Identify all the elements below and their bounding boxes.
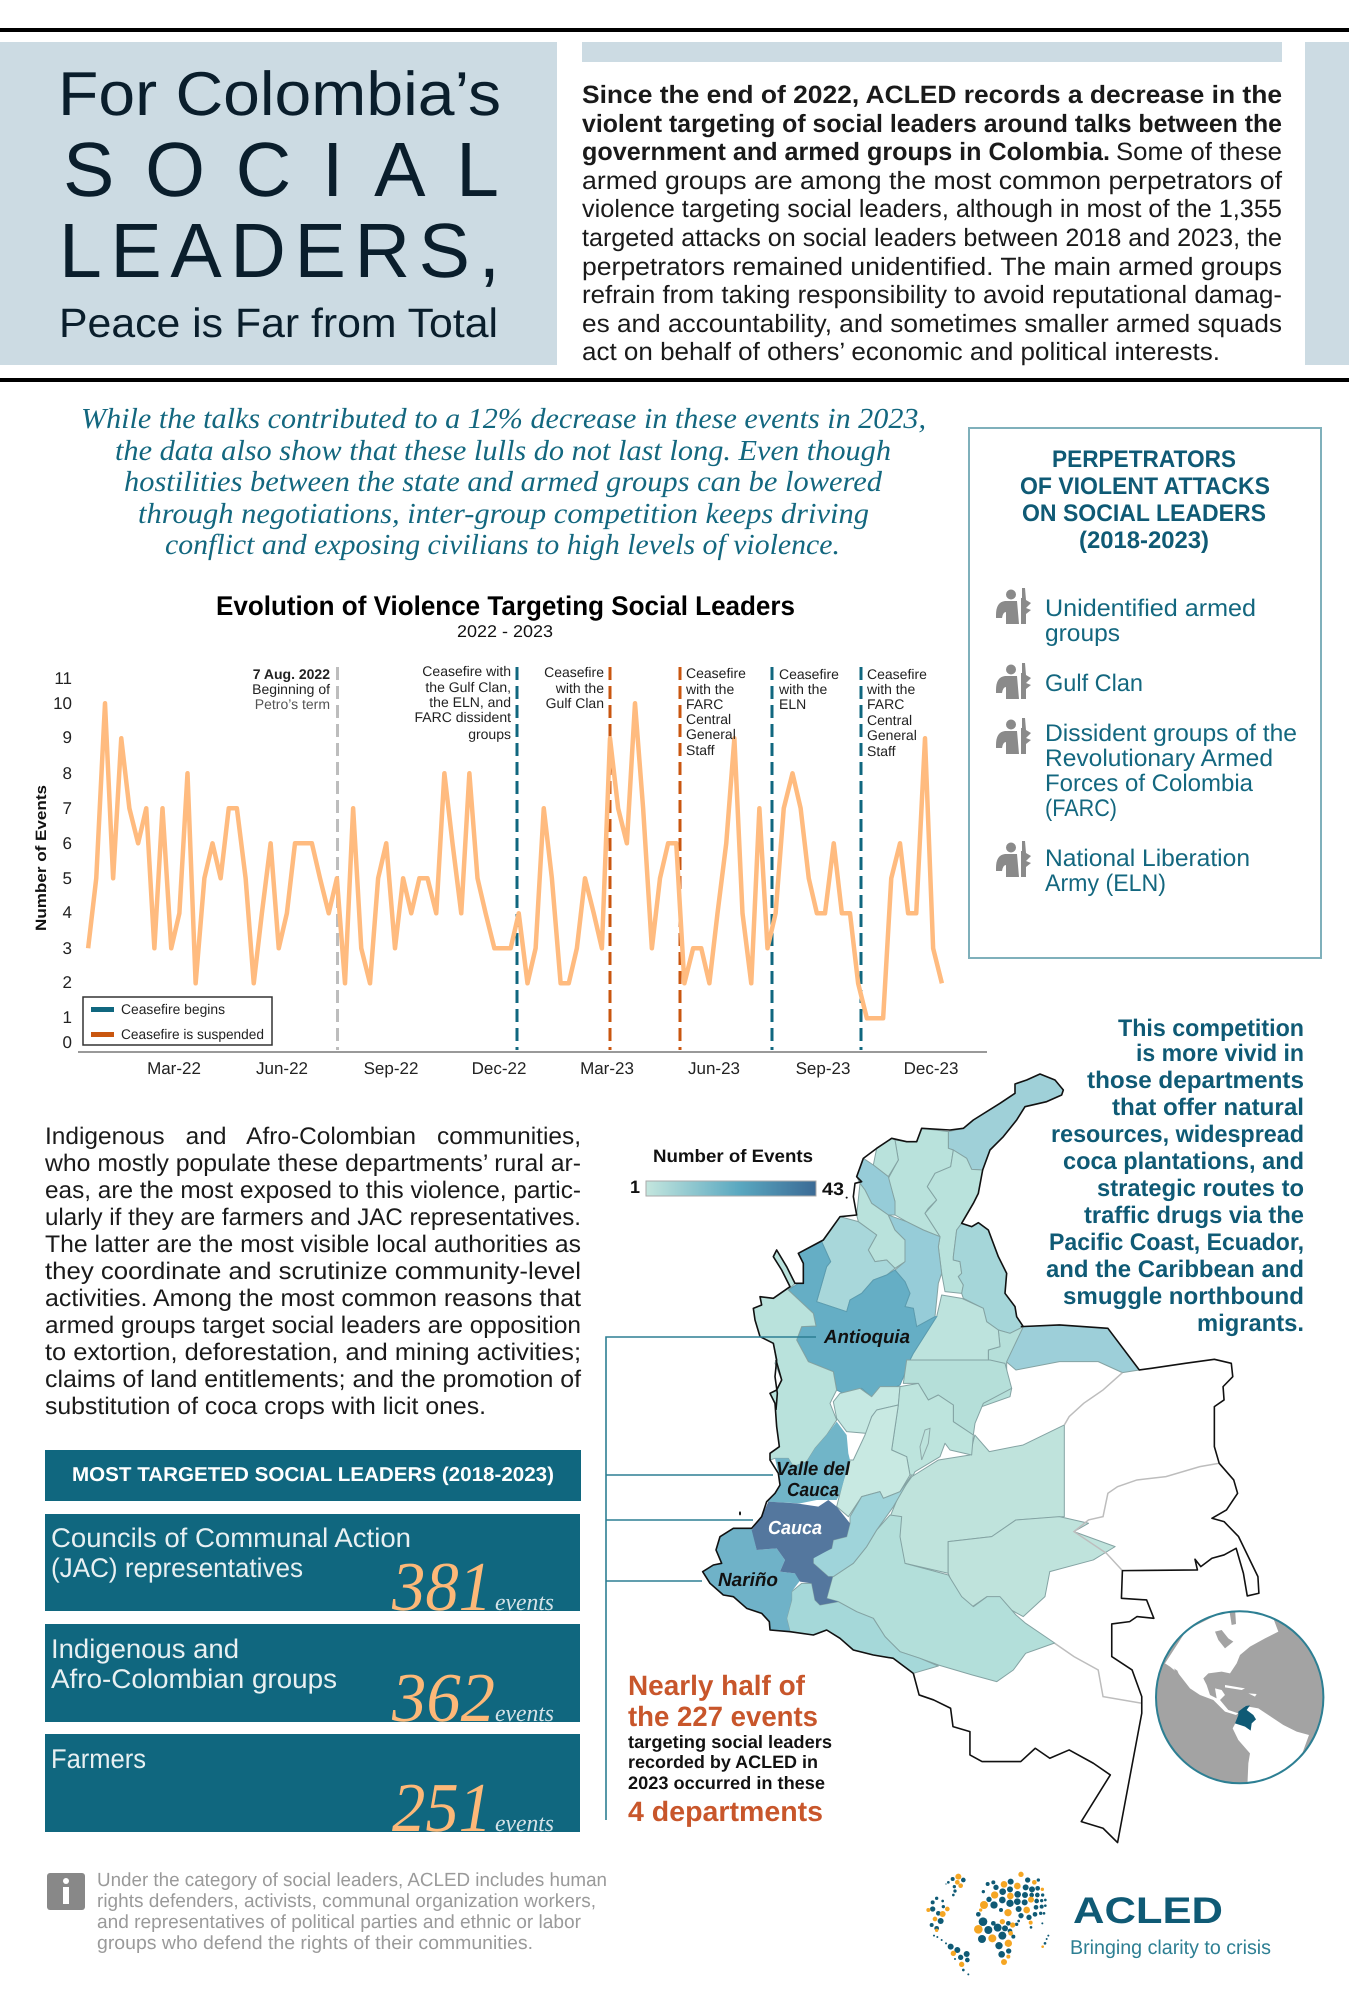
annotation: ceasefire with FARC Central General Staff (second): Ceasefire — [867, 666, 927, 682]
text block: introduction — [582, 81, 1282, 366]
text block: competition callout: and the Caribbean and — [1046, 1256, 1304, 1283]
annotation: ceasefire with Gulf Clan, ELN and FARC dissidents: the ELN, and — [429, 694, 511, 710]
annotation: ceasefire with FARC Central General Staff: Ceasefire — [686, 665, 746, 681]
label: national liberation army — [1045, 845, 1250, 897]
map: Colombia departments — [703, 1074, 1259, 1843]
text block: italic pull quote — [81, 403, 926, 561]
card: Indigenous and Afro-Colombian groups: Afro-Colombian groups — [51, 1664, 337, 1694]
text block: italic pull quote: through negotiations, inter-group competition keeps driving — [138, 498, 869, 530]
annotation: beginning of Petro's term: Beginning of — [252, 681, 330, 697]
heading bar — [45, 1450, 581, 1501]
annotation: ceasefire with Gulf Clan, ELN and FARC dissidents: the Gulf Clan, — [425, 679, 511, 695]
chart title: 2022 - 2023 — [457, 622, 553, 641]
heading: perpetrators — [1020, 446, 1270, 554]
text block: note on social leaders: Under the category of social leaders, ACLED includes human — [97, 1870, 607, 1891]
y axis labels: 6 — [63, 834, 72, 853]
annotation: ceasefire with Gulf Clan, ELN and FARC dissidents: FARC dissident — [415, 709, 511, 725]
text block: nearly half callout: recorded by ACLED in — [628, 1752, 818, 1772]
annotation: ceasefire with ELN — [778, 666, 839, 712]
map label: Valle del Cauca: Valle del — [776, 1459, 851, 1480]
text block: competition callout: those departments — [1087, 1067, 1304, 1094]
map legend: number of events: Number of Events — [653, 1146, 813, 1166]
chart legend: Ceasefire is suspended — [121, 1026, 264, 1042]
text block: communities: eas, are the most exposed to this violence, partic- — [45, 1177, 581, 1204]
x axis labels: Sep-23 — [796, 1059, 850, 1078]
card: JAC representatives: (JAC) representatives — [51, 1553, 303, 1583]
icon: armed person — [996, 663, 1031, 699]
x axis labels: Mar-22 — [147, 1059, 201, 1078]
text block: competition callout: is more vivid in — [1136, 1040, 1304, 1067]
text block: communities: substitution of coca crops with licit ones. — [45, 1393, 486, 1420]
heading bar: MOST TARGETED SOCIAL LEADERS (2018-2023) — [72, 1464, 554, 1486]
title: For Colombia’s — [58, 60, 501, 129]
label: unidentified armed groups: Unidentified armed — [1045, 595, 1256, 622]
text block: introduction: armed groups are among the most common perpetrators of — [582, 167, 1282, 195]
text block: competition callout: migrants. — [1197, 1310, 1304, 1337]
heading: perpetrators: ON SOCIAL LEADERS — [1022, 500, 1266, 527]
text block: competition callout: smuggle northbound — [1063, 1283, 1304, 1310]
icon: armed person — [996, 588, 1031, 624]
text block: nearly half callout: Nearly half of — [628, 1670, 806, 1701]
annotation: ceasefire with FARC Central General Staff (second): Central — [867, 712, 912, 728]
panel: title — [0, 42, 557, 365]
text block: competition callout: Pacific Coast, Ecuador, — [1049, 1229, 1304, 1256]
map label: Nariño: Nariño — [718, 1570, 778, 1591]
logo: ACLED — [926, 1872, 1271, 1975]
card: JAC representatives: events — [495, 1590, 554, 1616]
annotation: beginning of Petro's term: 7 Aug. 2022 — [253, 666, 330, 682]
text block: competition callout: coca plantations, and — [1063, 1148, 1304, 1175]
card: Indigenous and Afro-Colombian groups: Indigenous and — [51, 1634, 239, 1664]
annotation: ceasefire with FARC Central General Staff — [685, 665, 746, 758]
annotation: ceasefire with FARC Central General Staff: Staff — [686, 742, 715, 758]
text block: communities: claims of land entitlements; and the promotion of — [45, 1366, 581, 1393]
label: FARC dissidents: Dissident groups of the — [1045, 720, 1297, 747]
annotation: beginning of Petro's term — [252, 666, 330, 712]
text block: communities: to extortion, deforestation, and mining activities; — [45, 1339, 581, 1366]
panel: top accent bar — [582, 42, 1282, 62]
label: unidentified armed groups: groups — [1045, 620, 1120, 647]
card: farmers: events — [495, 1811, 554, 1837]
ceasefire event markers — [338, 667, 861, 1050]
x axis labels — [147, 1059, 958, 1078]
annotation: ceasefire with Gulf Clan: Ceasefire — [544, 664, 604, 680]
card: JAC representatives — [45, 1514, 580, 1626]
annotation: ceasefire with FARC Central General Staff: with the — [685, 681, 734, 697]
heading: perpetrators: OF VIOLENT ATTACKS — [1020, 473, 1270, 500]
annotation: ceasefire with Gulf Clan: Gulf Clan — [546, 695, 604, 711]
title: SOCIAL — [63, 127, 499, 213]
card: farmers — [45, 1734, 580, 1847]
heading: perpetrators: PERPETRATORS — [1052, 446, 1236, 473]
card: JAC representatives: 381 — [391, 1549, 492, 1626]
y axis title: Number of Events — [33, 785, 50, 931]
text block: introduction: targeted attacks on social leaders between 2018 and 2023, the — [582, 224, 1282, 252]
card: Indigenous and Afro-Colombian groups — [45, 1624, 580, 1737]
heading: perpetrators: (2018-2023) — [1079, 527, 1209, 554]
annotation: ceasefire with ELN: Ceasefire — [779, 666, 839, 682]
text block: nearly half callout: targeting social leaders — [628, 1732, 832, 1752]
logo wordmark: ACLED — [1073, 1890, 1223, 1931]
annotation: ceasefire with FARC Central General Staff: General — [686, 726, 736, 742]
icon: dotted globe — [926, 1872, 1049, 1975]
map legend: number of events: 43 — [822, 1179, 844, 1199]
text block: introduction: violence targeting social leaders, although in most of the 1,355 — [582, 195, 1282, 223]
logo tagline: Bringing clarity to crisis — [1070, 1937, 1271, 1959]
x axis labels: Dec-23 — [904, 1059, 958, 1078]
annotation: ceasefire with ELN: with the — [778, 681, 827, 697]
panel: most targeted social leaders — [45, 1450, 581, 1847]
text block: italic pull quote: the data also show that these lulls do not last long. Even though — [115, 435, 891, 467]
title: Peace is Far from Total — [59, 300, 498, 346]
label: unidentified armed groups — [1045, 595, 1256, 647]
card: Indigenous and Afro-Colombian groups: 362 — [391, 1660, 495, 1737]
label: FARC dissidents: Forces of Colombia — [1045, 770, 1254, 797]
y axis labels — [53, 669, 72, 1052]
annotation: ceasefire with FARC Central General Staff (second): Staff — [867, 743, 896, 759]
y axis labels: 0 — [63, 1033, 72, 1052]
map legend: number of events — [630, 1146, 844, 1199]
icon: armed person — [996, 718, 1031, 754]
text block: note on social leaders: groups who defend the rights of their communities. — [97, 1933, 533, 1954]
title — [58, 60, 501, 346]
annotation: ceasefire with Gulf Clan: with the — [555, 680, 604, 696]
x axis labels: Jun-22 — [256, 1059, 308, 1078]
label: national liberation army: National Liberation — [1045, 845, 1250, 872]
text block: introduction: act on behalf of others’ economic and political interests. — [582, 338, 1220, 366]
annotation: ceasefire with FARC Central General Staff (second) — [866, 666, 927, 759]
text block: communities: they coordinate and scrutinize community-level — [45, 1258, 581, 1285]
text block: introduction: Since the end of 2022, ACLED records a decrease in the — [582, 81, 1282, 109]
map label: Antioquia: Antioquia — [823, 1327, 910, 1348]
x axis labels: Mar-23 — [580, 1059, 634, 1078]
label: gulf clan: Gulf Clan — [1045, 670, 1143, 697]
y axis labels: 9 — [63, 728, 72, 747]
chart legend: Ceasefire begins — [121, 1001, 225, 1017]
annotation: ceasefire with ELN: ELN — [779, 696, 806, 712]
x axis labels: Sep-22 — [364, 1059, 418, 1078]
text block: communities: who mostly populate these departments’ rural ar- — [44, 1150, 581, 1177]
text block: introduction: Some of these — [1116, 138, 1282, 166]
text block: italic pull quote: hostilities between the state and armed groups can be lowered — [124, 466, 883, 498]
text block: communities: activities. Among the most common reasons that — [45, 1285, 581, 1312]
title: LEADERS, — [59, 208, 500, 294]
text block: nearly half callout — [628, 1670, 832, 1827]
text block: note on social leaders: rights defenders, activists, communal organization workers, — [97, 1891, 596, 1912]
y axis labels: 8 — [63, 764, 72, 783]
map label: Valle del Cauca — [776, 1459, 851, 1501]
map label: Valle del Cauca: Cauca — [787, 1480, 839, 1501]
y axis labels: 10 — [53, 694, 72, 713]
card: JAC representatives: Councils of Communal Action — [51, 1523, 411, 1553]
x axis labels: Dec-22 — [472, 1059, 526, 1078]
annotation: ceasefire with FARC Central General Staff: FARC — [686, 696, 723, 712]
text block: nearly half callout: the 227 events — [628, 1701, 818, 1732]
text block: introduction: refrain from taking responsibility to avoid reputational damag- — [582, 281, 1282, 309]
map label: Cauca: Cauca — [768, 1518, 822, 1539]
label: FARC dissidents: Revolutionary Armed — [1045, 745, 1273, 772]
text block: competition callout: that offer natural — [1112, 1094, 1304, 1121]
panel: perpetrators — [969, 428, 1321, 958]
annotation: ceasefire with Gulf Clan — [544, 664, 604, 711]
panel: right accent block — [1305, 42, 1349, 365]
text block: communities: ularly if they are farmers and JAC representatives. — [45, 1204, 581, 1231]
map legend: number of events: 1 — [630, 1177, 640, 1197]
text block: introduction: violent targeting of social leaders around talks between the — [582, 110, 1282, 138]
chart legend — [83, 997, 272, 1045]
chart title — [216, 591, 795, 641]
y axis labels: 7 — [63, 799, 72, 818]
text block: competition callout: This competition — [1118, 1015, 1304, 1042]
text block: competition callout — [1046, 1015, 1304, 1337]
annotation: ceasefire with FARC Central General Staff: Central — [686, 711, 731, 727]
text block: note on social leaders — [97, 1870, 607, 1954]
annotation: ceasefire with Gulf Clan, ELN and FARC dissidents — [415, 663, 511, 742]
y axis labels: 11 — [54, 669, 72, 688]
text block: introduction: perpetrators remained unidentified. The main armed groups — [582, 253, 1282, 281]
annotation: ceasefire with FARC Central General Staff (second): FARC — [867, 696, 904, 712]
text block: communities — [44, 1123, 581, 1420]
annotation: beginning of Petro's term: Petro’s term — [255, 696, 330, 712]
text block: communities: Indigenous and Afro-Colombian communities, — [45, 1123, 581, 1150]
callout connector lines — [606, 1337, 816, 1820]
chart: evolution of violence line chart — [33, 591, 987, 1078]
card: farmers: 251 — [392, 1770, 492, 1847]
text block: competition callout: strategic routes to — [1097, 1175, 1304, 1202]
icon: info — [47, 1873, 85, 1910]
annotation: ceasefire with FARC Central General Staff (second): General — [867, 727, 917, 743]
text block: nearly half callout: 4 departments — [628, 1796, 823, 1827]
text block: competition callout: resources, widespread — [1051, 1121, 1304, 1148]
text block: introduction: es and accountability, and sometimes smaller armed squads — [582, 310, 1282, 338]
y axis labels: 5 — [63, 869, 72, 888]
text block: introduction: government and armed groups in Colombia. — [582, 138, 1110, 166]
x axis labels: Jun-23 — [688, 1059, 740, 1078]
y axis labels: 1 — [63, 1008, 72, 1027]
annotation: ceasefire with Gulf Clan, ELN and FARC dissidents: Ceasefire with — [422, 663, 511, 679]
chart title: Evolution of Violence Targeting Social Leaders — [216, 591, 795, 621]
text block: italic pull quote: conflict and exposing civilians to high levels of violence. — [165, 529, 840, 561]
label: FARC dissidents — [1045, 720, 1297, 822]
label: national liberation army: Army (ELN) — [1045, 870, 1166, 897]
text block: italic pull quote: While the talks contributed to a 12% decrease in these events in 2023, — [81, 403, 926, 435]
text block: communities: The latter are the most visible local authorities as — [45, 1231, 581, 1258]
text block: note on social leaders: and representatives of political parties and ethnic or labor — [97, 1912, 582, 1933]
text block: nearly half callout: 2023 occurred in these — [628, 1773, 825, 1793]
y axis labels: 3 — [63, 939, 72, 958]
card: farmers: Farmers — [51, 1744, 146, 1774]
text block: communities: armed groups target social leaders are opposition — [45, 1312, 581, 1339]
inset: globe locator — [1156, 1608, 1323, 1787]
y axis labels: 2 — [63, 973, 72, 992]
y axis labels: 4 — [63, 903, 72, 922]
annotation: ceasefire with FARC Central General Staff (second): with the — [866, 681, 915, 697]
text block: competition callout: traffic drugs via the — [1084, 1202, 1304, 1229]
label: FARC dissidents: (FARC) — [1045, 795, 1117, 822]
data line — [88, 703, 942, 1018]
icon: armed person — [996, 841, 1031, 877]
card: Indigenous and Afro-Colombian groups: events — [495, 1701, 554, 1727]
annotation: ceasefire with Gulf Clan, ELN and FARC dissidents: groups — [468, 726, 511, 742]
